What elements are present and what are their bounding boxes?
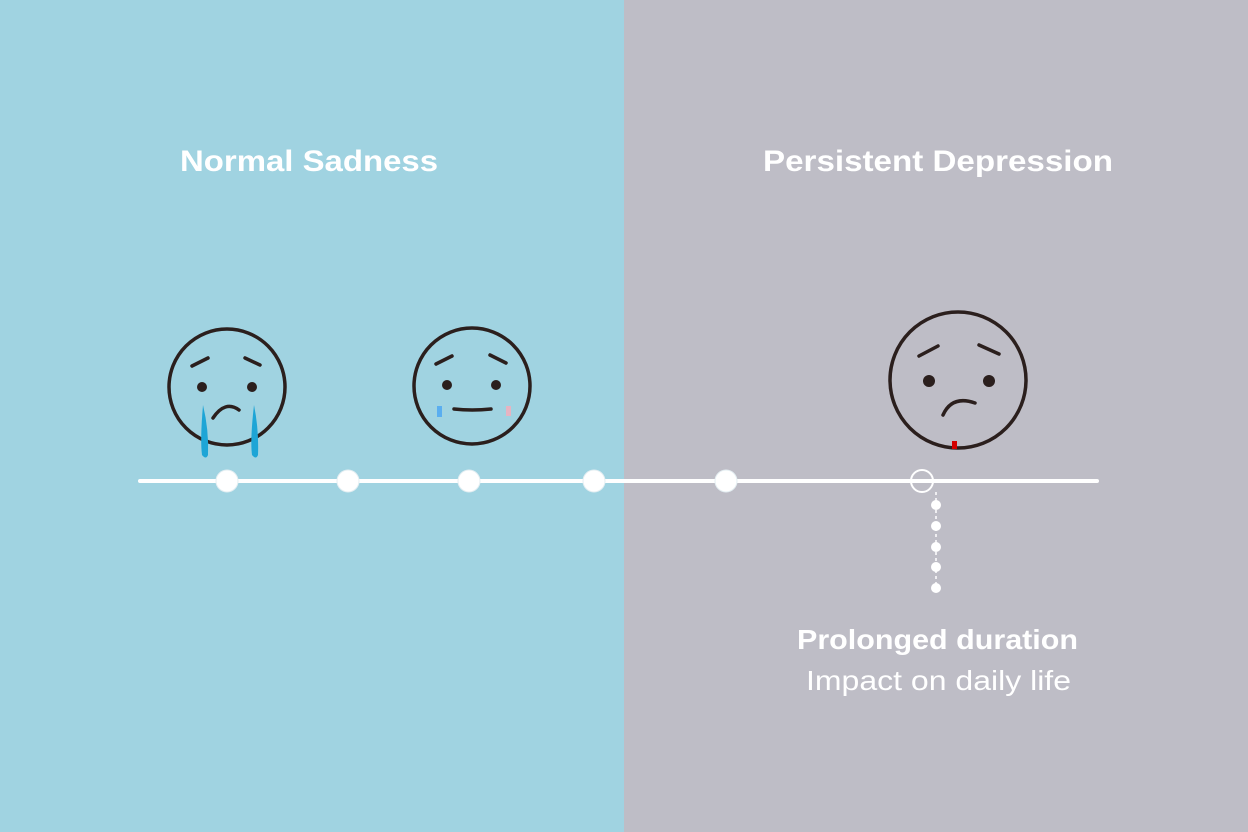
panel: persistent depression <box>624 0 1248 832</box>
icon: mildly sad face <box>414 328 530 444</box>
timeline <box>140 470 1097 492</box>
icon: depressed face <box>890 312 1026 449</box>
icon: crying face <box>169 329 285 458</box>
text: prolonged duration: Prolonged duration <box>797 624 1078 655</box>
panel: normal sadness <box>0 0 624 832</box>
text: impact on daily life: Impact on daily life <box>806 665 1071 696</box>
title: persistent depression: Persistent Depression <box>763 145 1113 178</box>
title: normal sadness: Normal Sadness <box>180 145 438 178</box>
duration markers <box>931 492 941 593</box>
